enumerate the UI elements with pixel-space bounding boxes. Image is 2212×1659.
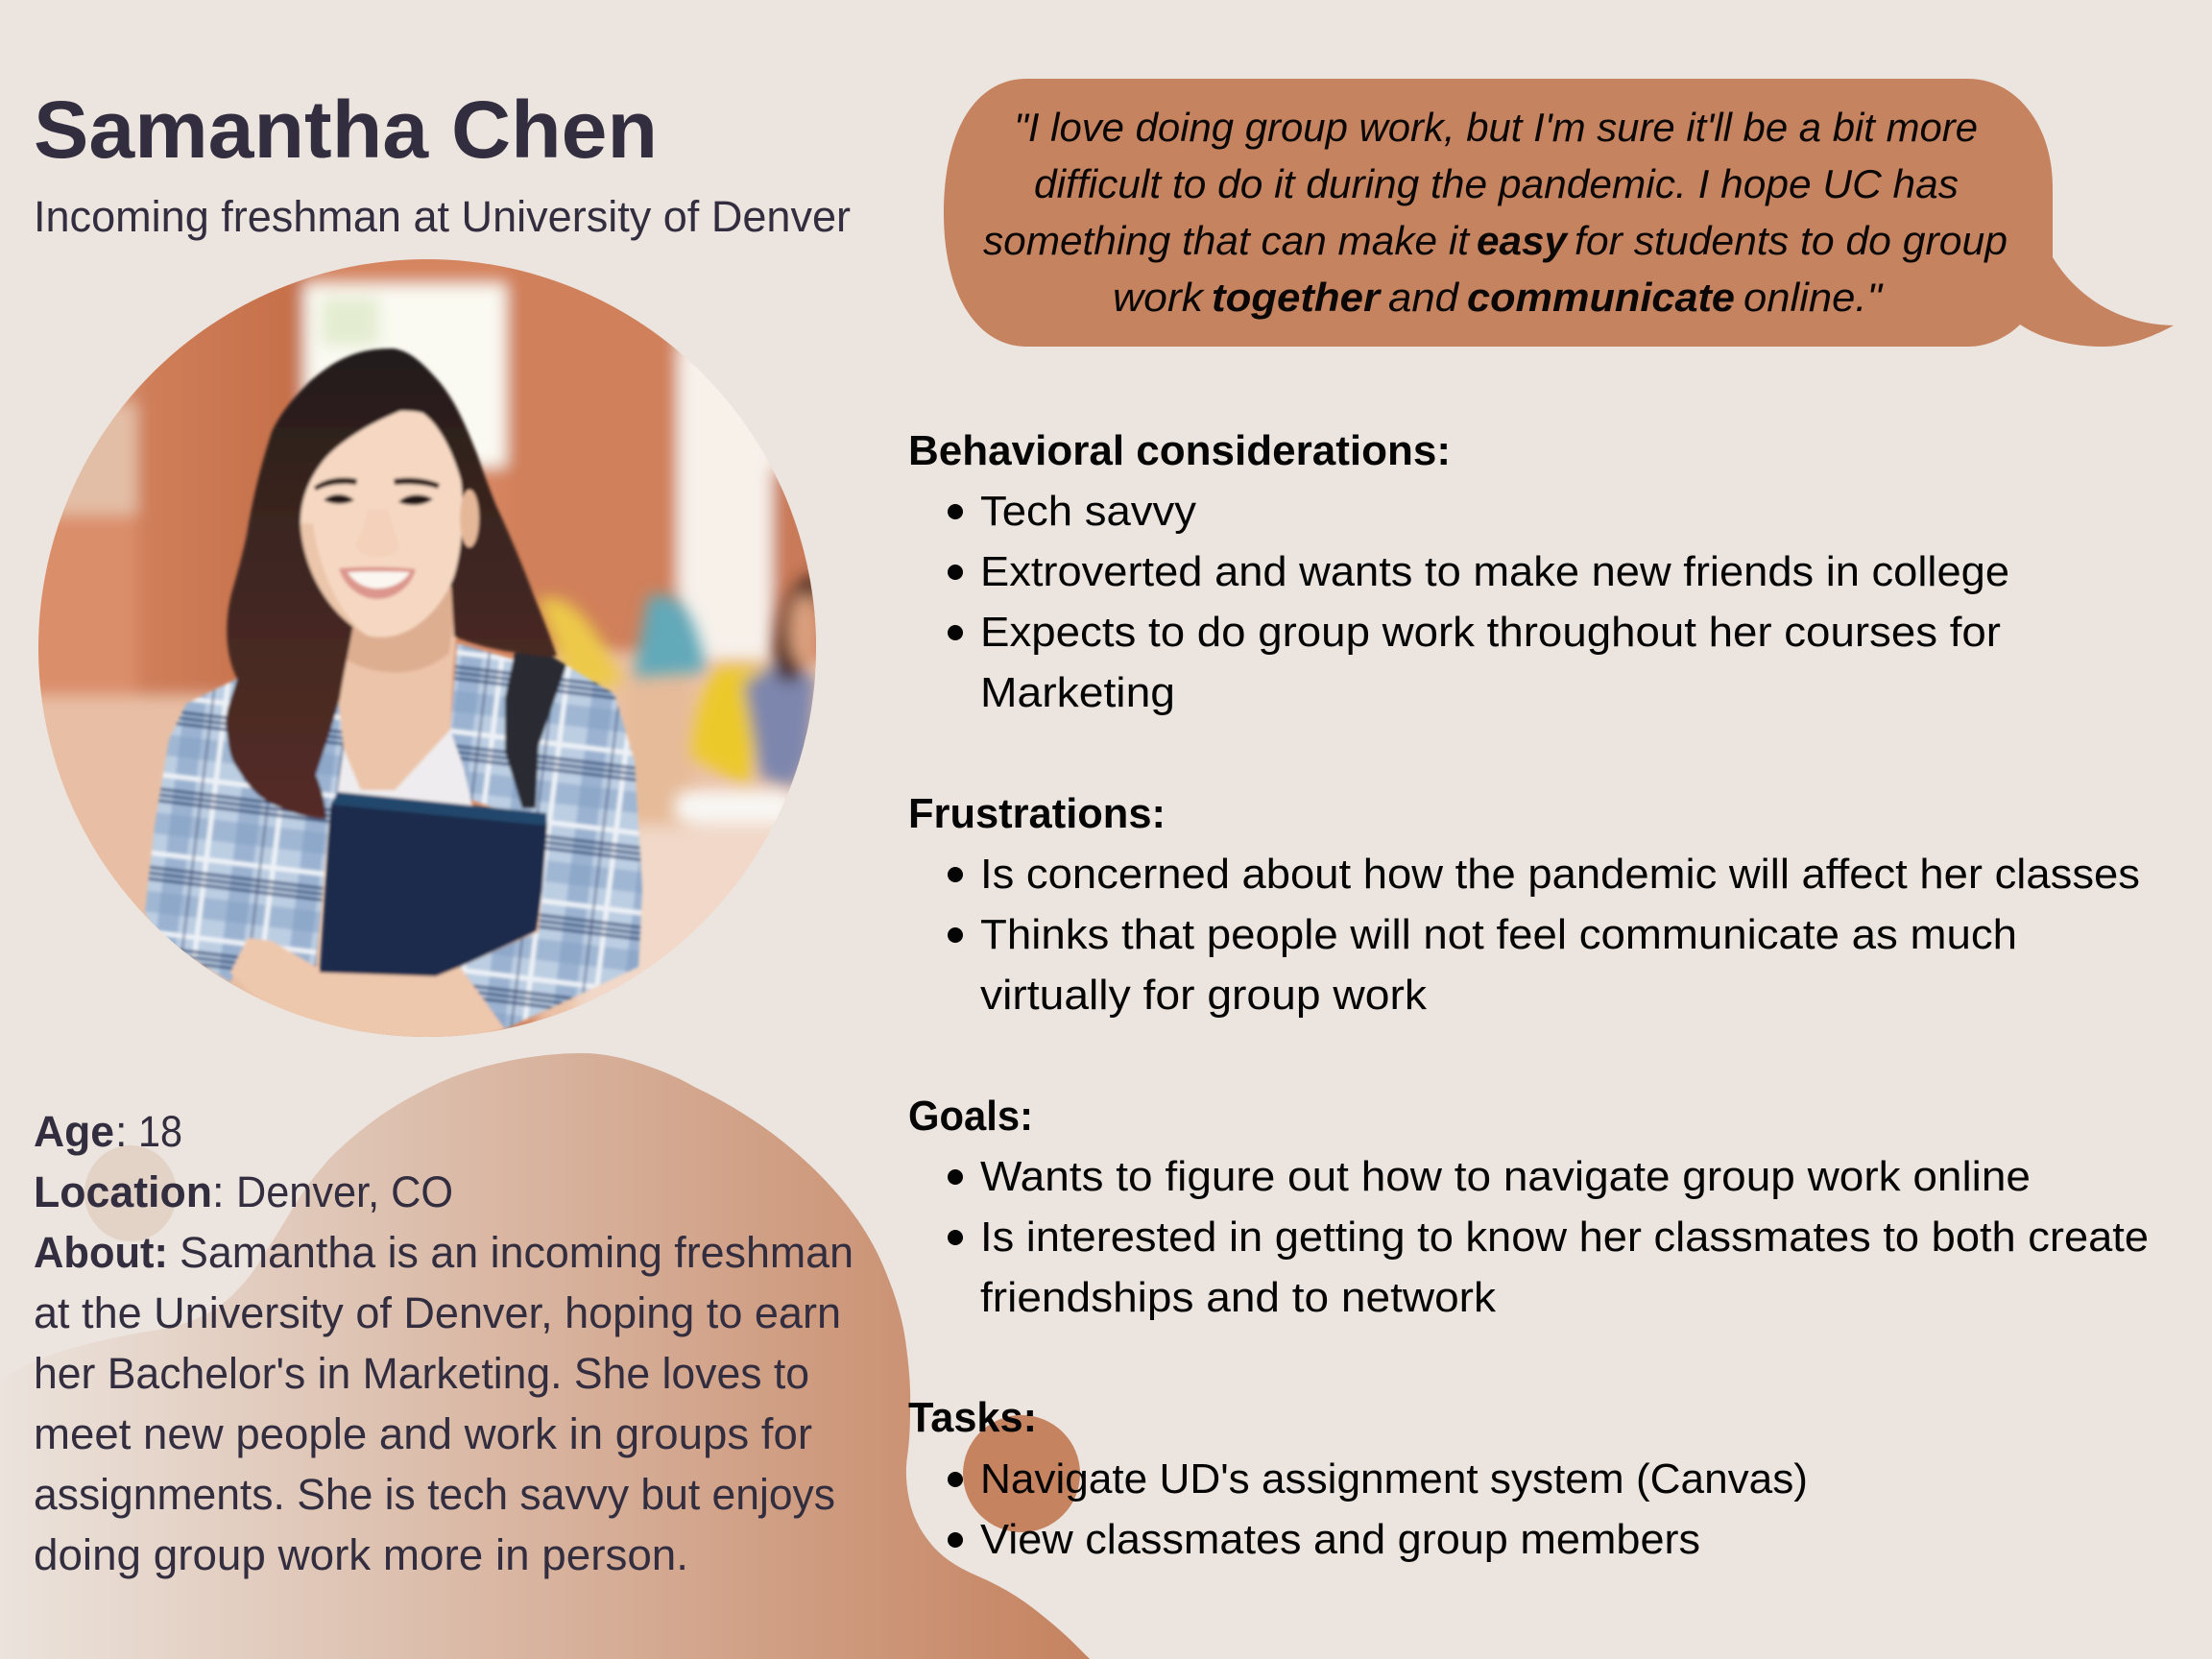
section: behavioral considerations	[908, 427, 2009, 716]
section: tasks	[908, 1394, 1808, 1563]
bullet list	[948, 1153, 2149, 1321]
about: at the University of Denver, hoping to earn	[34, 1288, 841, 1337]
bullet list: Tech savvy	[980, 488, 1196, 535]
quote line 4: and	[1388, 275, 1460, 320]
about: assignments. She is tech savvy but enjoys	[34, 1470, 835, 1519]
bullet list	[948, 488, 2009, 716]
subtitle: Incoming freshman at University of Denver	[34, 192, 851, 241]
location	[34, 1167, 453, 1216]
quote line 3: easy	[1477, 218, 1570, 263]
about: About:	[34, 1228, 168, 1277]
quote line 4: communicate	[1467, 275, 1735, 320]
decorative blob	[0, 1053, 1090, 1659]
about	[34, 1228, 854, 1579]
about: doing group work more in person.	[34, 1530, 688, 1579]
quote line 4: together	[1212, 275, 1382, 320]
arm and hand	[230, 938, 505, 1046]
small light circle	[84, 1145, 177, 1241]
quote bubble	[944, 79, 2174, 347]
brows	[314, 478, 357, 491]
small dark circle	[963, 1415, 1080, 1532]
smile	[339, 567, 416, 599]
heading: Frustrations:	[908, 790, 1166, 837]
quote line 3: for students to do group	[1575, 218, 2008, 263]
section: frustrations	[908, 790, 2140, 1019]
bullet list: Navigate UD's assignment system (Canvas)	[980, 1455, 1808, 1503]
woman	[145, 349, 642, 1046]
quote line 3	[983, 218, 2008, 263]
plaid shirt left	[145, 679, 354, 982]
bullet list	[948, 1455, 1808, 1563]
location: :	[212, 1167, 225, 1216]
about: meet new people and work in groups for	[34, 1409, 812, 1458]
bullet list: Is interested in getting to know her classmates to both create	[980, 1214, 2149, 1261]
face	[301, 411, 463, 637]
heading: Behavioral considerations:	[908, 427, 1451, 474]
age: :	[115, 1107, 128, 1156]
hair	[226, 349, 557, 819]
neck	[336, 624, 459, 792]
bullet list: friendships and to network	[980, 1274, 1497, 1321]
plaid shirt right	[450, 643, 642, 1029]
photo: student portrait	[38, 259, 816, 1037]
photo background	[38, 259, 816, 1037]
nose	[355, 509, 400, 557]
bullet list: Expects to do group work throughout her courses for	[980, 609, 2001, 656]
section: goals	[908, 1093, 2149, 1321]
bullet list: Thinks that people will not feel communicate as much	[980, 911, 2017, 958]
about: Samantha is an incoming freshman	[180, 1228, 854, 1277]
bullet list: Wants to figure out how to navigate group work online	[980, 1153, 2031, 1200]
background chairs and seated person	[538, 572, 821, 824]
left profile text	[34, 1107, 854, 1579]
face shading	[300, 522, 361, 632]
white tee	[336, 730, 472, 806]
eyes	[324, 494, 354, 504]
quote line 2: difficult to do it during the pandemic. I hope UC has	[1034, 161, 1959, 206]
heading: Goals:	[908, 1093, 1033, 1140]
bullet list: Marketing	[980, 669, 1175, 716]
location: Location	[34, 1167, 212, 1216]
title: Samantha Chen	[34, 84, 658, 175]
age: Age	[34, 1107, 114, 1156]
location: Denver, CO	[236, 1167, 453, 1216]
age: 18	[138, 1107, 182, 1156]
notebook	[320, 792, 547, 976]
about: her Bachelor's in Marketing. She loves to	[34, 1349, 809, 1398]
age	[34, 1107, 182, 1156]
bullet list: View classmates and group members	[980, 1516, 1700, 1563]
quote line 4: work	[1113, 275, 1205, 320]
quote line 4: online."	[1743, 275, 1884, 320]
bullet list: Is concerned about how the pandemic will affect her classes	[980, 851, 2140, 898]
quote line 4	[1113, 275, 1884, 320]
bullet list	[948, 851, 2140, 1019]
bullet list: virtually for group work	[980, 972, 1428, 1019]
backpack strap	[505, 653, 566, 808]
heading: Tasks:	[908, 1394, 1037, 1441]
bubble shape	[944, 79, 2174, 347]
quote line 3: something that can make it	[983, 218, 1471, 263]
quote line 1: "I love doing group work, but I'm sure it'll be a bit more	[1014, 105, 1978, 150]
ear	[460, 490, 479, 547]
bullet list: Extroverted and wants to make new friends in college	[980, 548, 2009, 595]
